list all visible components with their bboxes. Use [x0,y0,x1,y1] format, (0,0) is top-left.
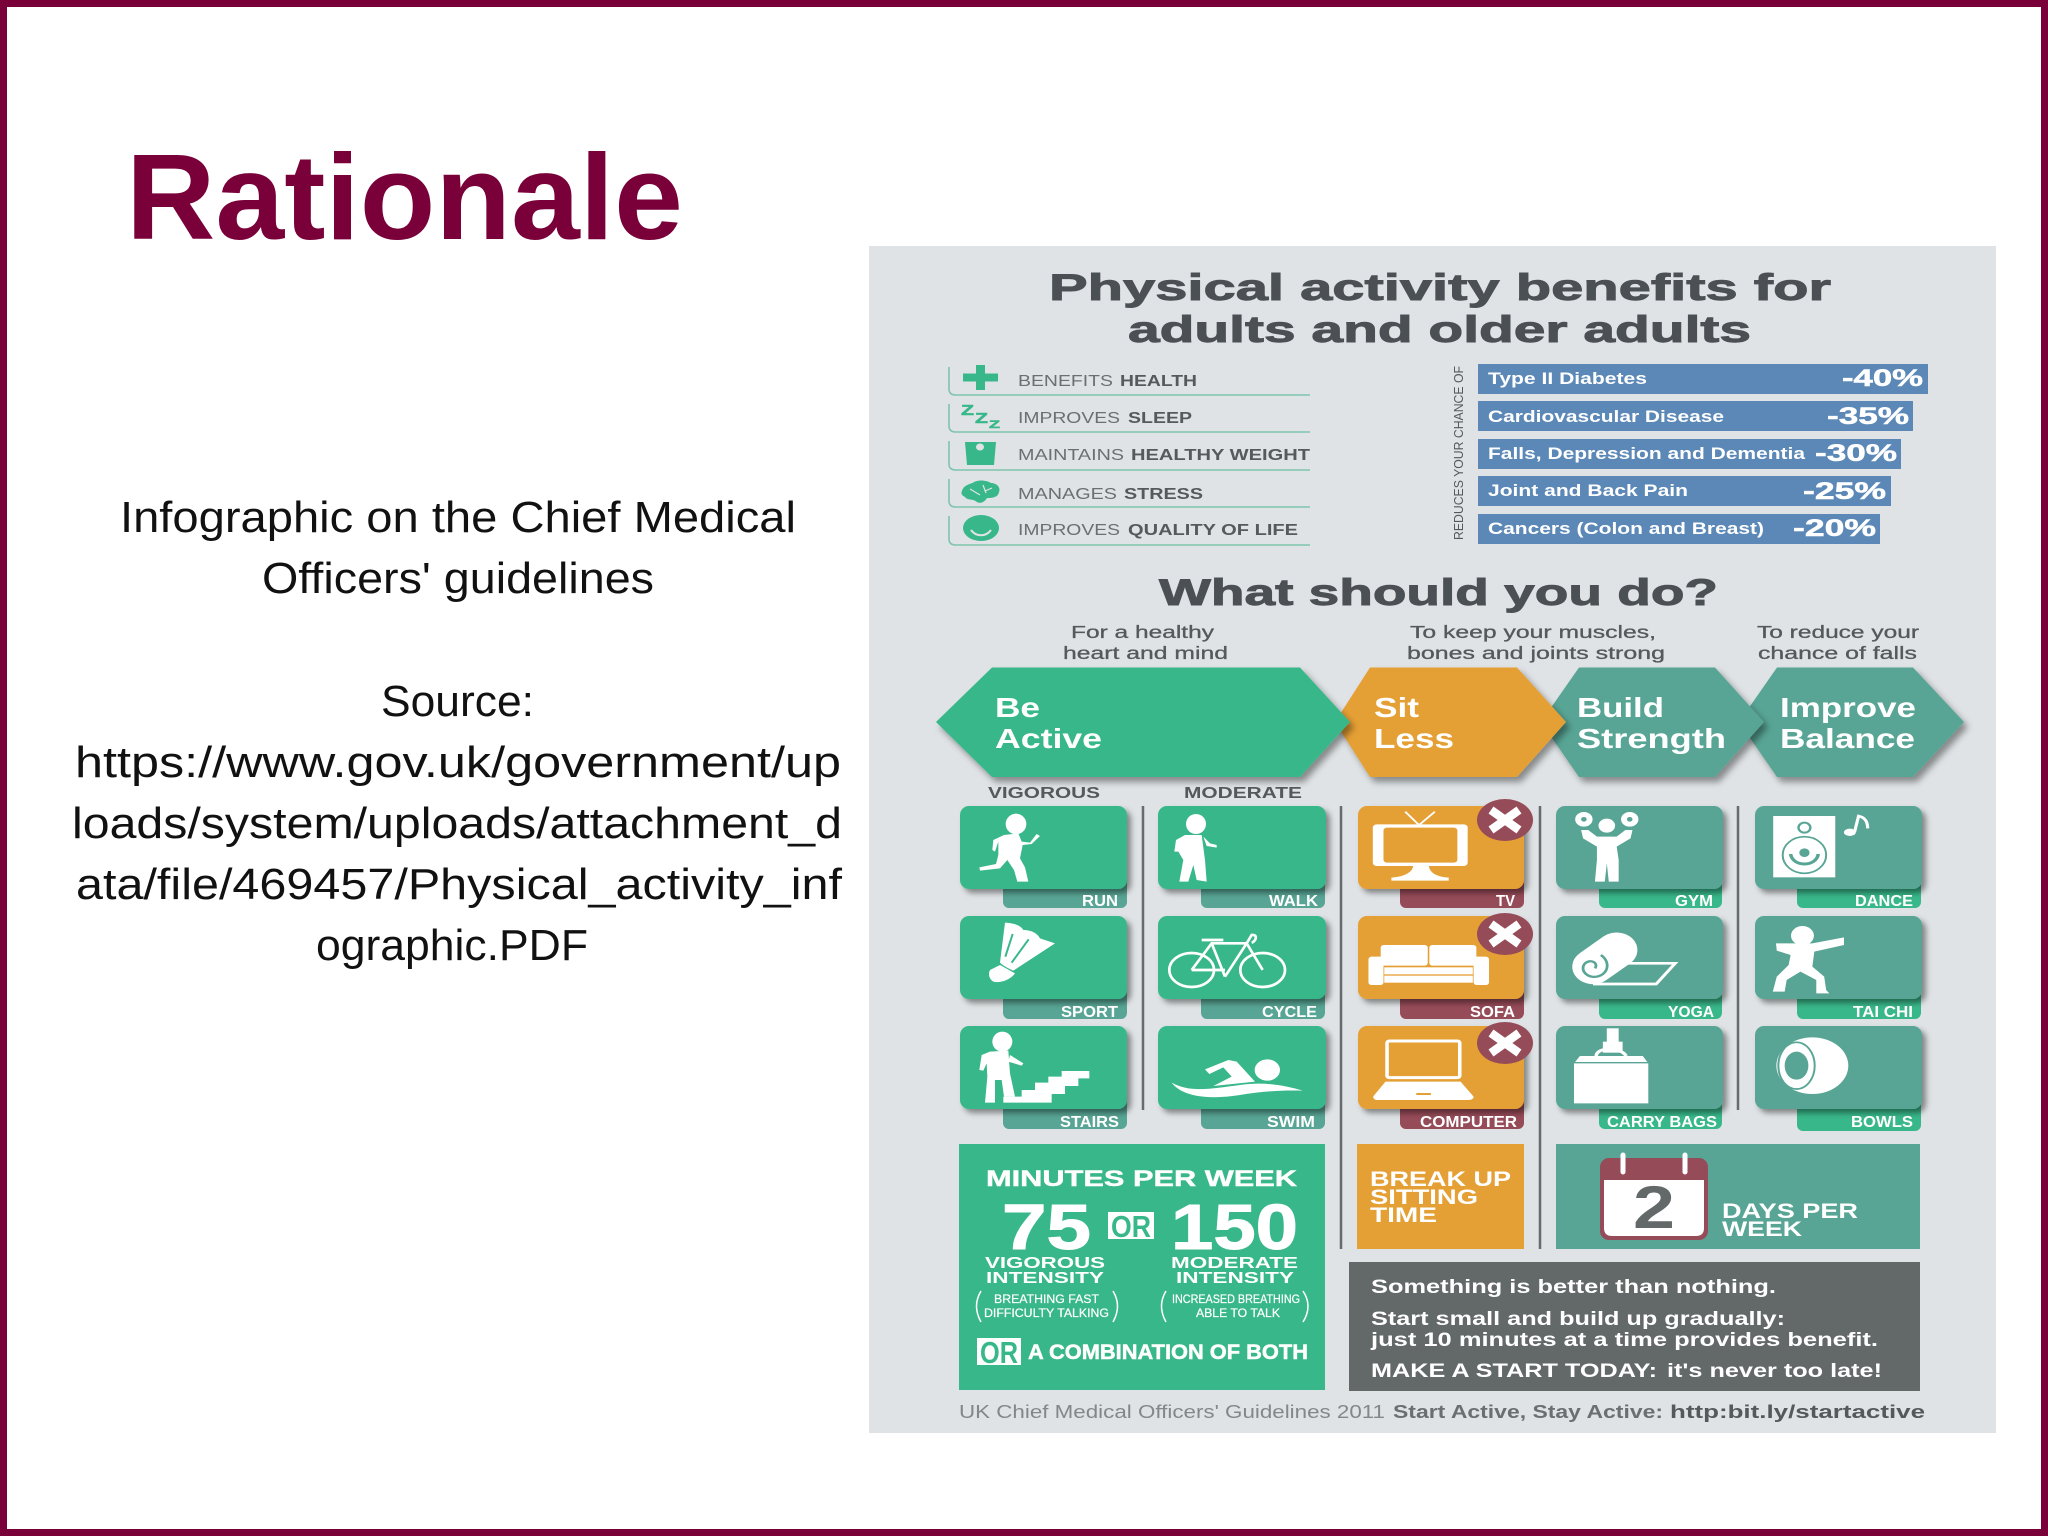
icon: walker [1174,814,1217,882]
tile: bowls [1755,1026,1922,1131]
infographic heading: Physical activity benefits for [1049,267,1831,308]
bar: falls, depression and dementia: -30% [1815,440,1897,467]
benefit row: healthy weight: HEALTHY WEIGHT [1131,447,1310,464]
benefit row: health: HEALTH [1120,373,1197,390]
text block: description and source: Officers' guidelines [262,554,654,603]
hexagon: be active [936,668,1350,777]
benefit row: sleep: IMPROVES [1018,410,1120,427]
icon: weight lifter [1575,812,1638,882]
tile: run: RUN [1082,893,1118,910]
hexagon: sit less: Less [1374,723,1454,754]
benefit row: stress [949,479,1310,507]
hexagon: improve balance: Balance [1780,723,1915,754]
hexagon: improve balance: Improve [1780,692,1916,723]
bar: type II diabetes: -40% [1842,365,1923,392]
icon: stairs climber [979,1032,1089,1103]
bar: joint and back pain [1478,476,1891,506]
tile: tv [1358,799,1533,910]
icon: cross [1477,913,1533,955]
caption group: hexagon purposes: For a healthy [1071,622,1214,642]
icon: sofa [1368,945,1489,985]
caption group: hexagon purposes: To reduce your [1757,622,1919,642]
hexagon: build strength: Build [1577,692,1664,723]
panel: break up sitting time [1357,1144,1524,1249]
tile: swim: SWIM [1267,1114,1315,1131]
icon: tai chi figure [1773,926,1844,993]
footer source line [959,1402,1925,1422]
icon: cross [1477,799,1533,841]
text block: description and source: https://www.gov.uk/government/up [75,738,841,787]
benefit row: quality of life [949,515,1310,545]
benefit row: sleep: SLEEP [1128,410,1192,427]
vertical label: REDUCES YOUR CHANCE OF [1451,366,1466,540]
tile: gym: GYM [1675,893,1713,910]
bar: cardiovascular disease: -35% [1827,403,1909,430]
hexagon: be active: Active [995,723,1102,754]
panel: minutes per week: VIGOROUS [985,1255,1105,1272]
tile: tai chi: TAI CHI [1853,1004,1913,1021]
tile: swim [1158,1026,1326,1131]
panel: infographic [869,246,1996,1433]
tile: dance [1755,806,1922,910]
panel: make a start: Start small and build up gradually: [1371,1309,1785,1330]
caption group: hexagon purposes [1063,622,1919,663]
panel: break up sitting time: SITTING [1370,1186,1478,1209]
text block: description and source: ata/file/469457/Physical_activity_inf [76,860,843,909]
tile: yoga: YOGA [1668,1004,1714,1021]
tile: computer: COMPUTER [1420,1114,1517,1131]
panel: make a start [1349,1262,1920,1391]
panel: break up sitting time: TIME [1370,1204,1437,1227]
panel: minutes per week: DIFFICULTY TALKING [984,1308,1109,1320]
tile: carry bags: CARRY BAGS [1607,1114,1717,1131]
tile: walk: WALK [1269,893,1318,910]
panel: minutes per week: MINUTES PER WEEK [986,1166,1297,1191]
text block: description and source: Infographic on the Chief Medical [120,493,796,542]
icon: calendar: 2 [1633,1174,1675,1241]
panel: minutes per week: OR [980,1335,1018,1370]
bar: falls, depression and dementia: Falls, Depression and Dementia [1488,444,1806,463]
icon: shopping bag [1574,1028,1648,1103]
panel: minutes per week: OR [1111,1209,1151,1244]
icon: swimmer [1172,1059,1303,1097]
text block: description and source: Source: [381,677,534,726]
panel: make a start: Something is better than nothing. [1371,1277,1776,1298]
panel: minutes per week: MODERATE [1171,1255,1298,1272]
panel: days per week [1556,1144,1920,1249]
panel: minutes per week: INTENSITY [986,1270,1104,1287]
tile: yoga [1556,916,1723,1021]
panel: minutes per week: 75 [1002,1191,1091,1263]
panel: minutes per week: 150 [1171,1191,1298,1263]
panel: minutes per week: ABLE TO TALK [1196,1308,1280,1320]
icon: yoga mat [1583,950,1675,984]
icon: speaker and note [1773,816,1868,877]
text block: description and source: loads/system/uploads/attachment_d [72,799,842,848]
footer source line: UK Chief Medical Officers' Guidelines 2011 [959,1402,1385,1422]
benefit row: sleep [949,402,1310,432]
bar: cardiovascular disease [1478,401,1913,431]
text block: description and source: ographic.PDF [316,921,588,970]
tile: sofa: SOFA [1470,1004,1515,1021]
tile: bowls: BOWLS [1851,1114,1913,1131]
bar: type II diabetes: Type II Diabetes [1488,369,1647,388]
bar chart: reduced risk [1478,364,1928,544]
footer source line: http:bit.ly/startactive [1670,1402,1925,1422]
tile: gym [1556,806,1723,910]
tile: tv: TV [1496,893,1515,910]
icon: calendar [1600,1155,1708,1241]
tile: tai chi [1755,916,1922,1021]
bar: cancers: -20% [1793,515,1876,542]
footer source line: Start Active, Stay Active: [1393,1402,1663,1422]
benefit row: sleep: Z [975,410,988,427]
caption group: hexagon purposes: heart and mind [1063,643,1228,663]
tile: stairs [960,1026,1127,1131]
text block: description and source [72,493,843,970]
panel: minutes per week: INTENSITY [1176,1270,1294,1287]
hexagon: build strength [1541,668,1764,777]
bar: falls, depression and dementia [1478,439,1901,469]
hexagon: build strength: Strength [1577,723,1726,754]
tile: run [960,806,1127,910]
column heading: vigorous: VIGOROUS [988,785,1100,802]
tile: walk [1158,806,1326,910]
panel: benefits list [949,365,1310,545]
benefit row: health [949,365,1310,395]
panel: minutes per week [959,1144,1325,1390]
hexagon: improve balance [1739,668,1964,777]
panel: days per week: DAYS PER [1722,1200,1858,1223]
tile: sport [960,916,1127,1021]
benefit row: sleep: Z [989,419,1000,431]
icon: bowl ball [1776,1037,1848,1094]
icon: runner [979,814,1040,882]
heading: what should you do: What should you do? [1159,572,1718,613]
tile: stairs: STAIRS [1060,1114,1119,1131]
bar: joint and back pain: -25% [1803,478,1886,505]
benefit row: healthy weight: MAINTAINS [1018,447,1124,464]
caption group: hexagon purposes: To keep your muscles, [1410,622,1656,642]
benefit row: quality of life: IMPROVES [1018,522,1120,539]
panel: minutes per week: BREATHING FAST [994,1294,1099,1306]
tile: carry bags [1556,1026,1723,1131]
panel: days per week: WEEK [1722,1218,1802,1241]
panel: make a start: just 10 minutes at a time provides benefit. [1370,1330,1878,1351]
hexagon: be active: Be [995,692,1040,723]
panel: minutes per week: INCREASED BREATHING [1172,1294,1300,1306]
title: Rationale [126,129,683,265]
panel: make a start: it's never too late! [1667,1361,1882,1382]
tile: cycle: CYCLE [1262,1004,1317,1021]
bar: cardiovascular disease: Cardiovascular Disease [1488,407,1724,426]
panel: minutes per week: A COMBINATION OF BOTH [1028,1341,1308,1364]
tile: sofa [1358,913,1533,1021]
icon: cross [1477,1022,1533,1064]
column heading: moderate: MODERATE [1184,785,1302,802]
benefit row: quality of life: QUALITY OF LIFE [1128,522,1298,539]
tile: cycle [1158,916,1326,1021]
tile: dance: DANCE [1855,893,1913,910]
tile: computer [1358,1022,1533,1131]
icon: bicycle [1169,935,1285,987]
caption group: hexagon purposes: chance of falls [1758,643,1917,663]
infographic heading: adults and older adults [1128,309,1751,350]
hexagon: sit less [1335,668,1566,777]
icon: television [1373,812,1468,881]
hexagon: sit less: Sit [1374,692,1419,723]
icon: laptop [1373,1041,1474,1100]
panel: make a start: MAKE A START TODAY: [1371,1361,1657,1382]
bar: type II diabetes [1478,364,1928,394]
icon: shuttlecock [989,923,1055,982]
panel: break up sitting time: BREAK UP [1370,1168,1511,1191]
caption group: hexagon purposes: bones and joints strong [1407,643,1665,663]
benefit row: stress: MANAGES [1018,486,1117,503]
benefit row: sleep: Z [961,402,974,419]
benefit row: healthy weight [949,441,1310,470]
tile: sport: SPORT [1061,1004,1118,1021]
benefit row: stress: STRESS [1124,486,1203,503]
bar: joint and back pain: Joint and Back Pain [1488,481,1688,500]
infographic heading [1049,267,1831,350]
bar: cancers: Cancers (Colon and Breast) [1488,519,1764,538]
bar: cancers [1478,514,1880,544]
benefit row: health: BENEFITS [1018,373,1113,390]
